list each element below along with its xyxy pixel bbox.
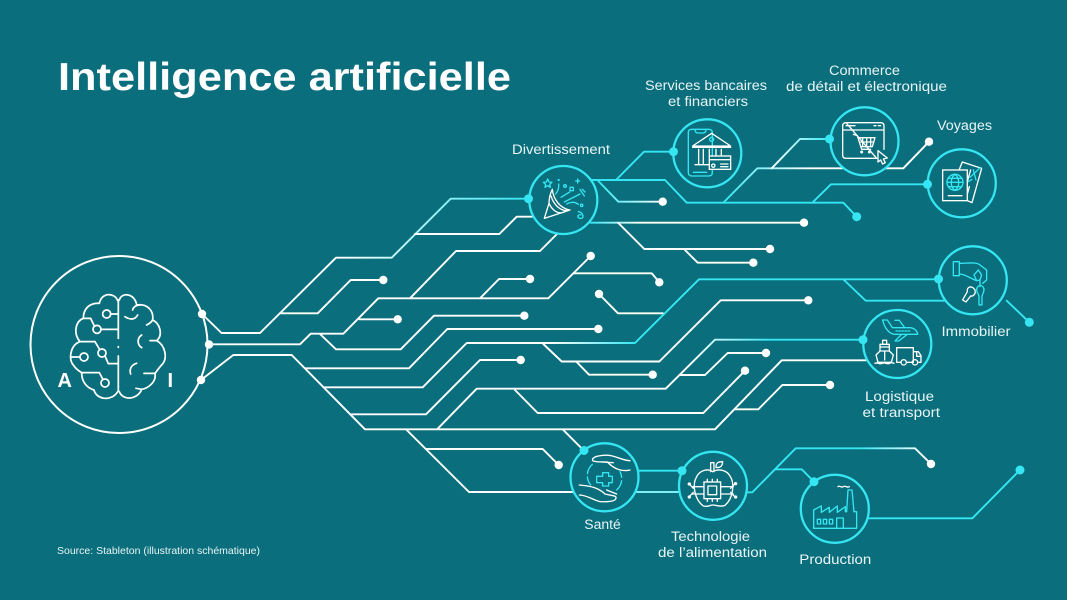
connector dot: [923, 180, 932, 189]
icon: passport and ticket: [943, 162, 982, 203]
label: Services bancaires: [645, 78, 767, 93]
panel: Services bancaires et financiers: [645, 78, 767, 187]
AI output dots: [197, 310, 213, 384]
icon: party popper: [543, 179, 585, 218]
label: Production: [799, 552, 871, 567]
source note: Source: Stableton (illustration schématique): [57, 545, 260, 557]
label: Voyages: [937, 118, 992, 133]
connector dot: [524, 194, 533, 203]
label: Logistique: [865, 389, 934, 404]
label: [862, 389, 940, 420]
label: et transport: [862, 405, 940, 420]
label: [645, 78, 767, 109]
connector dots: [934, 274, 1034, 327]
connector dot: [858, 335, 868, 344]
icon: online shop cart: [843, 123, 887, 164]
icon: apple with chip: [688, 462, 737, 506]
connector dot: [580, 446, 588, 455]
panel: Santé: [570, 443, 638, 532]
label: Santé: [584, 517, 621, 532]
label: [658, 529, 767, 560]
label: Immobilier: [942, 324, 1011, 339]
panel: AI brain: [30, 256, 213, 433]
label: Commerce: [829, 63, 900, 78]
panel: Voyages: [923, 118, 996, 217]
panel: Technologie de l'alimentation: [658, 452, 767, 560]
AI circle: [30, 256, 208, 433]
connector dot: [669, 147, 678, 156]
panel: Logistique et transport: [858, 310, 940, 420]
connector dot: [825, 134, 834, 144]
connector dots: [810, 466, 1024, 486]
label: [786, 63, 947, 94]
label: de détail et électronique: [786, 79, 947, 94]
label: et financiers: [668, 94, 748, 109]
label: Divertissement: [512, 142, 610, 157]
icon: factory: [814, 486, 857, 528]
title: Intelligence artificielle: [58, 56, 511, 99]
connector dot: [678, 466, 686, 475]
letter I: I: [168, 370, 173, 392]
circuit lines: [201, 139, 1029, 518]
icon: bank on phone: [688, 129, 731, 176]
panel: Production: [799, 466, 1024, 567]
icon: plane, ship, truck: [875, 320, 921, 365]
label: de l’alimentation: [658, 545, 767, 560]
icon: hands and cross: [579, 455, 630, 502]
panel: Immobilier: [934, 246, 1034, 339]
icon: hand with keys: [953, 262, 987, 305]
icon: brain: [71, 295, 165, 398]
connector dots: [379, 138, 935, 469]
remaining connector dot: [852, 212, 861, 221]
letter A: A: [58, 370, 72, 392]
panel: Commerce de détail et électronique: [786, 63, 947, 175]
panel: Divertissement: [512, 142, 610, 234]
label: Technologie: [671, 529, 750, 544]
